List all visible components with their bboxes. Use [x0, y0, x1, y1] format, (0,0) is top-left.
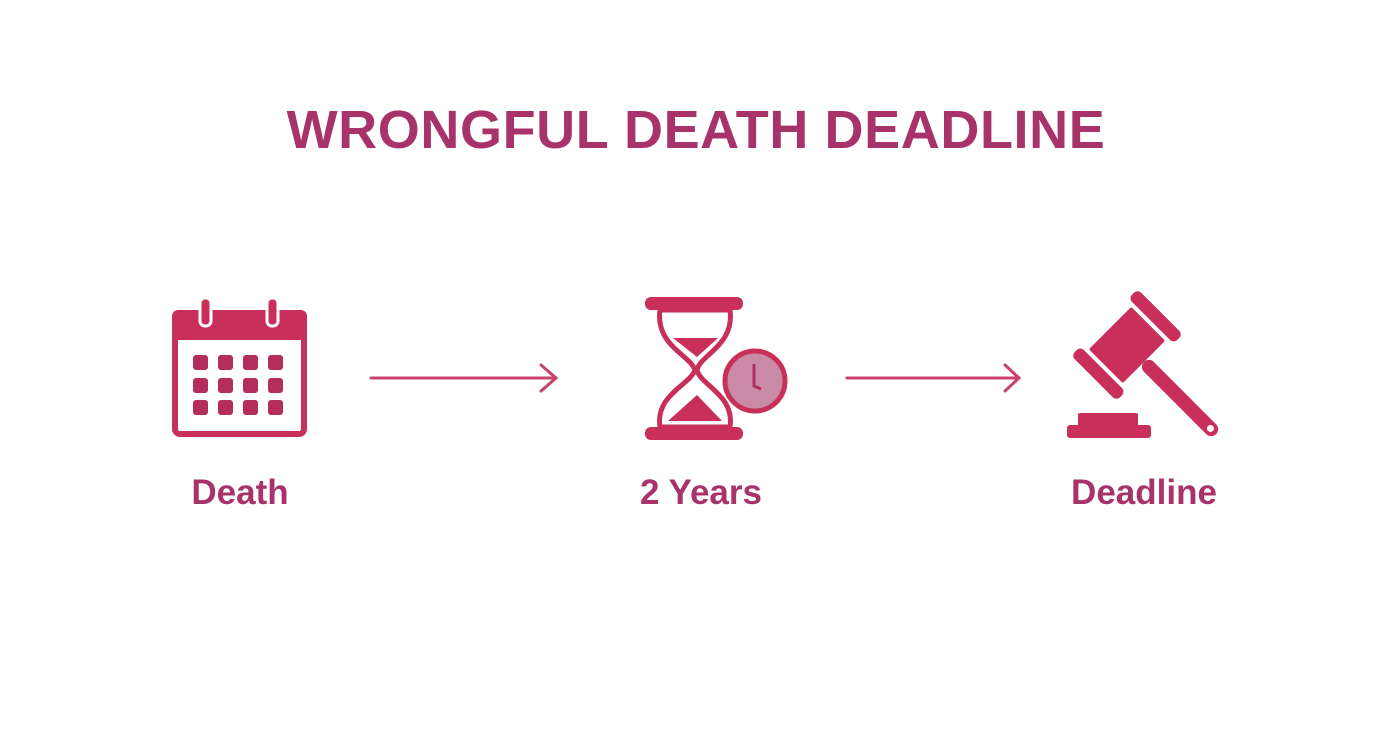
- label: Death: Death: [191, 473, 289, 512]
- arrow 1: [371, 365, 556, 391]
- label: 2 Years: 2 Years: [640, 473, 762, 512]
- icon: hourglass with clock: [645, 297, 785, 440]
- label: Deadline: Deadline: [1071, 473, 1217, 512]
- icon: calendar: [172, 298, 307, 434]
- title: WRONGFUL DEATH DEADLINE: [287, 100, 1105, 160]
- icon: gavel: [1067, 289, 1249, 467]
- arrow 2: [847, 365, 1019, 391]
